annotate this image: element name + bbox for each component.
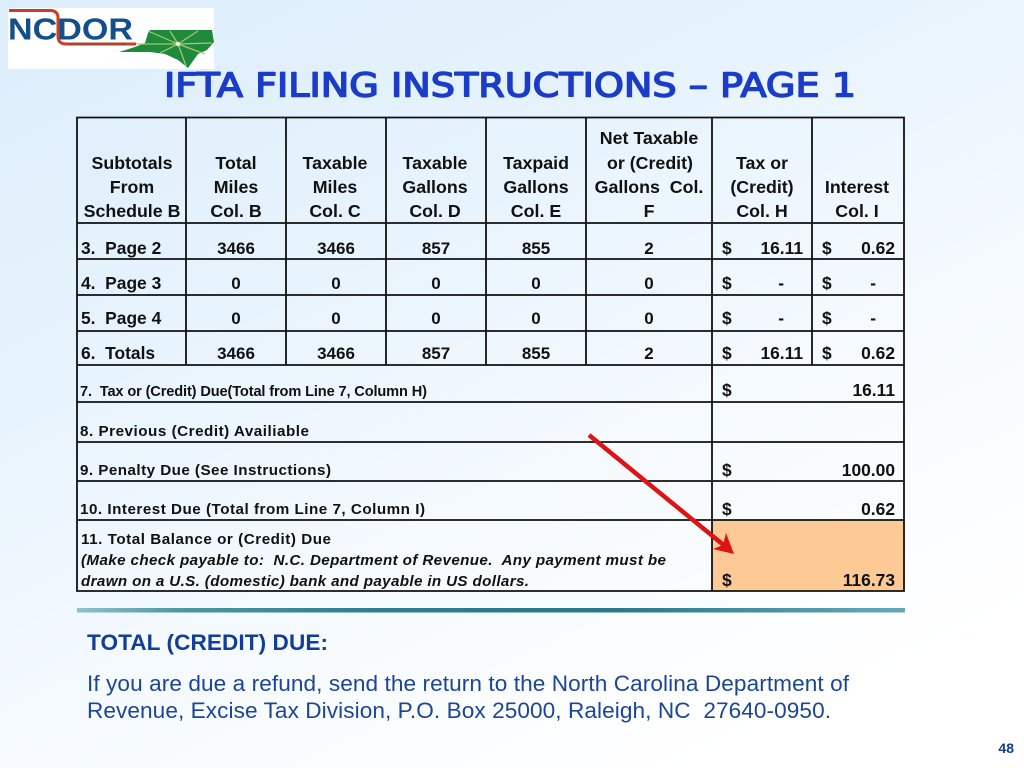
row: totals: $ [722, 343, 732, 363]
row: line 11 total balance [81, 531, 895, 590]
row: page 3: - [778, 273, 784, 293]
row: page 3: 0 [331, 274, 341, 293]
row: line 9 penalty: $ [722, 460, 732, 480]
row: page 2: 0.62 [861, 238, 895, 258]
row: line 10 interest [80, 499, 895, 519]
table header: Net Taxable [600, 128, 698, 148]
table header: Col. B [210, 201, 262, 221]
row: line 11 total balance: (Make check payable to: N.C. Department of Revenue. Any payment must be [81, 552, 667, 569]
table header: Gallons [402, 177, 468, 197]
title: IFTA FILING INSTRUCTIONS – PAGE 1 [164, 66, 856, 104]
row: line 10 interest: 0.62 [861, 499, 895, 519]
row: page 3: $ [722, 273, 732, 293]
row: page 3: $ [822, 273, 832, 293]
row: line 11 total balance: 116.73 [843, 570, 895, 590]
row: page 2: 3466 [317, 239, 355, 258]
row: line 7 tax due: 16.11 [852, 380, 895, 400]
table header: Taxable [303, 153, 368, 173]
row: page 4: 0 [531, 309, 541, 328]
table header: Col. D [409, 201, 461, 221]
logo: NCDOR [8, 8, 214, 69]
row: page 3: 0 [431, 274, 441, 293]
row: line 7 tax due: $ [722, 380, 732, 400]
row: page 4: $ [822, 308, 832, 328]
logo red line [9, 10, 136, 44]
row: totals: 0.62 [861, 343, 895, 363]
table header: (Credit) [730, 177, 794, 197]
row: line 9 penalty: 9. Penalty Due (See Instructions) [80, 462, 331, 479]
row: page 4: 0 [644, 309, 654, 328]
row: page 2: 3466 [217, 239, 255, 258]
table header: or (Credit) [607, 153, 693, 173]
row: page 2: 3. Page 2 [81, 238, 161, 258]
logo wordmark: NCDOR [8, 12, 133, 46]
table header: Col. C [309, 201, 361, 221]
row: line 11 total balance: $ [722, 570, 732, 590]
row: totals [81, 343, 895, 363]
row: page 3: 0 [231, 274, 241, 293]
row: page 2: 857 [422, 239, 450, 258]
heading: total credit due: TOTAL (CREDIT) DUE: [87, 630, 328, 655]
row: page 4: 5. Page 4 [81, 308, 162, 328]
row: page 3: - [870, 273, 876, 293]
row: totals: 2 [644, 344, 654, 363]
row: page 4 [81, 308, 876, 328]
row: page 4: $ [722, 308, 732, 328]
table header: From [110, 177, 154, 197]
row: page 2: 2 [644, 239, 654, 258]
row: line 7 tax due [80, 380, 895, 400]
table: tax return summary [77, 117, 904, 591]
row: page 4: 0 [331, 309, 341, 328]
table header: Tax or [736, 153, 788, 173]
row: totals: 16.11 [760, 343, 803, 363]
row: line 9 penalty [80, 460, 895, 480]
table header: Col. E [511, 201, 561, 221]
row: totals: 3466 [317, 344, 355, 363]
row: totals: 857 [422, 344, 450, 363]
highlighted total cell [712, 520, 904, 591]
row: line 10 interest: $ [722, 499, 732, 519]
row: totals: $ [822, 343, 832, 363]
row: page 2: $ [722, 238, 732, 258]
table header: Subtotals [91, 153, 173, 173]
table header: Taxpaid [503, 153, 569, 173]
table header: Miles [214, 177, 258, 197]
row: page 3 [81, 273, 876, 293]
row: page 4: - [778, 308, 784, 328]
table header: Gallons [503, 177, 569, 197]
row: page 2: $ [822, 238, 832, 258]
table header: F [644, 201, 655, 221]
table header: Total [215, 153, 257, 173]
row: page 2 [81, 238, 895, 258]
row: page 3: 4. Page 3 [81, 273, 162, 293]
table header: Col. I [835, 201, 879, 221]
row: page 3: 0 [644, 274, 654, 293]
row: page 4: 0 [231, 309, 241, 328]
row: line 11 total balance: drawn on a U.S. (domestic) bank and payable in US dollars. [81, 573, 529, 590]
row: line 8 previous credit: 8. Previous (Credit) Availiable [80, 423, 309, 440]
body text: refund instructions [87, 671, 850, 723]
logo state map [119, 30, 214, 68]
row: totals: 3466 [217, 344, 255, 363]
row: line 9 penalty: 100.00 [842, 460, 895, 480]
table header: Interest [825, 177, 889, 197]
row: page 2: 855 [522, 239, 550, 258]
row: page 2: 16.11 [760, 238, 803, 258]
page number: 48 [998, 740, 1014, 756]
row: line 11 total balance: 11. Total Balance or (Credit) Due [81, 531, 331, 548]
row: page 3: 0 [531, 274, 541, 293]
row: totals: 6. Totals [81, 343, 155, 363]
row: line 7 tax due: 7. Tax or (Credit) Due(Total from Line 7, Column H) [80, 384, 427, 400]
row: page 4: 0 [431, 309, 441, 328]
logo department band [70, 42, 126, 46]
row: line 10 interest: 10. Interest Due (Total from Line 7, Column I) [80, 501, 425, 518]
body text: refund instructions: Revenue, Excise Tax Division, P.O. Box 25000, Raleigh, NC 27640-0950. [87, 698, 831, 723]
table header [84, 128, 889, 221]
divider rule [77, 608, 905, 612]
table header: Schedule B [84, 201, 181, 221]
table header: Gallons Col. [595, 177, 703, 197]
table header: Col. H [736, 201, 788, 221]
body text: refund instructions: If you are due a refund, send the return to the North Carolina Department of [87, 671, 850, 696]
table header: Taxable [403, 153, 468, 173]
row: page 4: - [870, 308, 876, 328]
row: totals: 855 [522, 344, 550, 363]
table header: Miles [313, 177, 357, 197]
arrow: to total due [589, 435, 734, 554]
